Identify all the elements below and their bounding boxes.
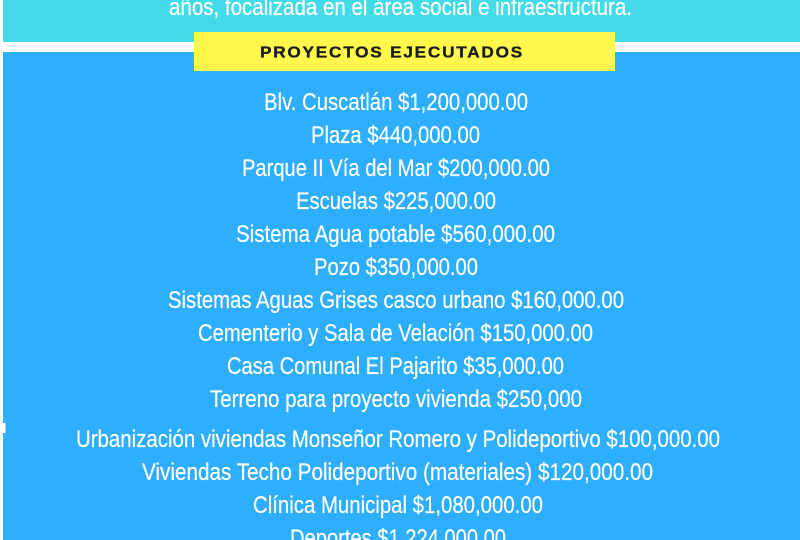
panel: intro banner — [3, 0, 800, 42]
project list rows: Cementerio y Sala de Velación $150,000.00 — [198, 320, 593, 347]
project list rows: Clínica Municipal $1,080,000.00 — [253, 492, 543, 519]
project list rows: Sistemas Aguas Grises casco urbano $160,000.00 — [168, 287, 624, 314]
project list rows: Sistema Agua potable $560,000.00 — [236, 221, 555, 248]
heading: proyectos ejecutados — [194, 32, 615, 71]
heading: proyectos ejecutados: PROYECTOS EJECUTADOS — [260, 44, 524, 62]
project list rows: Casa Comunal El Pajarito $35,000.00 — [227, 353, 564, 380]
project list rows: Terreno para proyecto vivienda $250,000 — [210, 386, 582, 413]
project list rows: Viviendas Techo Polideportivo (materiales) $120,000.00 — [142, 459, 653, 486]
project list rows: Pozo $350,000.00 — [314, 254, 478, 281]
project list rows: Blv. Cuscatlán $1,200,000.00 — [264, 89, 528, 116]
project list rows — [76, 89, 720, 540]
project list rows: Plaza $440,000.00 — [311, 122, 480, 149]
project list rows: Escuelas $225,000.00 — [296, 188, 496, 215]
project list rows: Parque II Vía del Mar $200,000.00 — [242, 155, 550, 182]
